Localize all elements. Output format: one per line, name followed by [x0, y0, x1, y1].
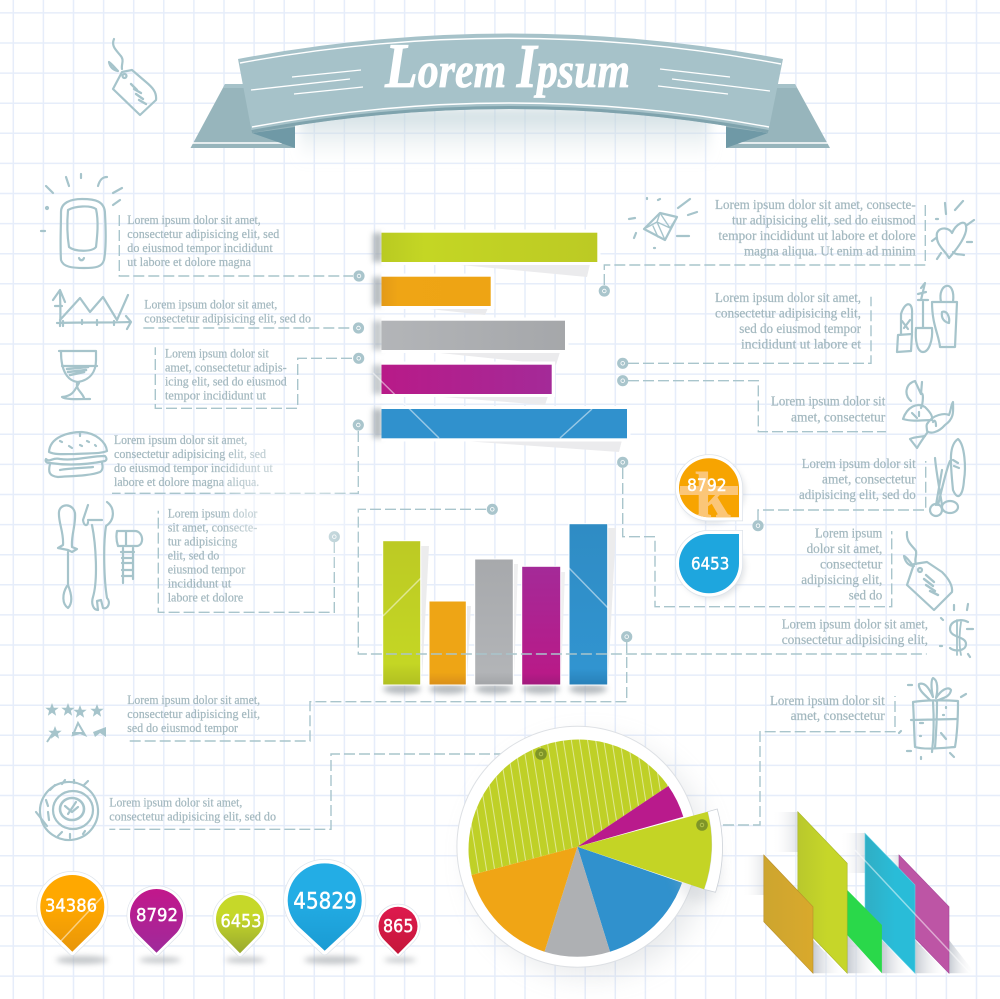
map pin: 8792 [130, 889, 183, 963]
title text: Lorem Ipsum [384, 30, 630, 101]
text block: tire: consectetur adipisicing elit, sed do [109, 810, 276, 824]
text block: diamond and heart: tur adipisicing elit, sed do eiusmod [732, 212, 916, 227]
isometric bar: magenta [899, 855, 949, 973]
text block: tire [109, 796, 276, 824]
node: pie top [535, 748, 547, 760]
slice: magenta [577, 786, 683, 847]
text block: tag: sed do [849, 588, 883, 602]
connector: graph text to bar [143, 322, 364, 334]
connector: scissors text [752, 461, 926, 531]
text block: scissors: Lorem ipsum dolor sit [802, 456, 916, 471]
icon: gift [899, 678, 966, 759]
connector: column chart to stars text [127, 631, 632, 741]
slice: hatched lime [469, 740, 668, 875]
text block: stars: Lorem ipsum dolor sit amet, [127, 693, 260, 707]
slice: exploded lime [577, 809, 723, 902]
pin value: 45829 [293, 890, 357, 914]
icon: price tag right [904, 532, 952, 610]
text block: burger: Lorem ipsum dolor sit amet, [114, 433, 247, 447]
connector: diamond text [599, 203, 925, 297]
callout drop: 6453 [679, 534, 745, 599]
icon: scissors and bread [930, 439, 965, 516]
column chart [383, 524, 616, 694]
map pin: 6453 [216, 895, 265, 963]
text block: gift: amet, consectetur [791, 708, 885, 723]
text block: gift [770, 693, 885, 723]
text block: dollar [782, 616, 928, 647]
text block: tag: consectetur [820, 556, 883, 572]
text block: tools: incididunt ut [168, 577, 232, 591]
isometric bar: olive [798, 812, 847, 973]
icon: line graph [53, 290, 131, 329]
text block: tag: adipisicing elit, [801, 572, 882, 587]
text block: cosmetics: incididunt ut labore et [741, 336, 861, 351]
connector: pie to gift text [708, 696, 895, 825]
text block: cosmetics [715, 290, 862, 351]
text block: tag: Lorem ipsum [815, 525, 883, 540]
column: orange [429, 601, 466, 685]
icon: tools [58, 502, 142, 610]
bar: magenta [382, 365, 552, 394]
text block: stars: consectetur adipisicing elit, [127, 707, 260, 721]
text block: burger: labore et dolore magna aliqua. [114, 475, 259, 489]
icon: burger [46, 432, 107, 477]
text block: scissors [799, 456, 916, 502]
icon: wine glass [59, 351, 97, 399]
isometric bar: cyan [865, 833, 915, 973]
text block: diamond and heart [715, 197, 916, 258]
text block: scissors: amet, consectetur [822, 472, 916, 486]
text block: glass: amet, consectetur adipis- [165, 361, 287, 375]
isometric bar chart [742, 812, 975, 973]
column: magenta [522, 566, 561, 685]
isometric bar: orange [764, 855, 813, 973]
icon: stars [45, 703, 106, 742]
text block: gift: Lorem ipsum dolor sit [770, 693, 885, 708]
text block: glass: tempor incididunt ut [165, 389, 266, 403]
connector: cosmetics text [617, 297, 871, 369]
icon: diamond [629, 198, 697, 248]
text block: phone: consectetur adipisicing elit, sed [127, 227, 280, 241]
icon: heart [932, 201, 974, 259]
isometric bar: green [847, 890, 882, 973]
text block: tools: eiusmod tempor [168, 563, 246, 577]
bar: lime [382, 233, 597, 262]
callout drop: 8792 [679, 458, 745, 532]
column: blue [569, 524, 608, 685]
text block: cosmetics: sed do eiusmod tempor [739, 321, 862, 336]
text block: tire: Lorem ipsum dolor sit amet, [109, 796, 242, 810]
text block: phone: ut labore et dolore magna [127, 255, 251, 269]
text block: burger [114, 433, 273, 489]
bar: blue [382, 409, 627, 438]
icon: price tag top left [109, 39, 156, 115]
connector: phone text to bar [119, 215, 365, 282]
connector: fish text [617, 375, 886, 432]
text block: phone: do eiusmod tempor incididunt [127, 241, 273, 255]
icon: fish [903, 381, 953, 448]
title ribbon banner [190, 30, 830, 163]
text block: fish: amet, consectetur [791, 409, 886, 424]
connector: pie to tire text [109, 754, 535, 829]
text block: graph [144, 297, 311, 325]
icon: tyre [35, 777, 103, 845]
connector: tools text [158, 511, 340, 612]
pin value: 34386 [45, 896, 97, 916]
text block: dollar: Lorem ipsum dolor sit amet, [782, 616, 928, 631]
text block: tag: dolor sit amet, [807, 541, 882, 556]
text block: cosmetics: consectetur adipisicing elit, [715, 306, 861, 321]
icon: smartphone [41, 174, 122, 268]
pin value: 6453 [220, 911, 262, 932]
text block: graph: consectetur adipisicing elit, sed do [144, 311, 311, 325]
text block: diamond and heart: tempor incididunt ut labore et dolore [718, 228, 916, 243]
icon: cosmetics [897, 283, 957, 352]
text block: diamond and heart: magna aliqua. Ut enim ad minim [744, 243, 916, 258]
column: lime [383, 541, 421, 685]
bar: orange [382, 277, 491, 306]
callout value: 6453 [691, 554, 729, 574]
text block: glass [165, 347, 287, 403]
node: pie right [696, 819, 708, 831]
text block: tools: labore et dolore [168, 591, 244, 605]
map pin: 45829 [288, 863, 362, 964]
text block: stars: sed do eiusmod tempor [127, 721, 239, 735]
text block: stars [127, 693, 260, 735]
connector: column chart frame to dollar text [358, 504, 927, 654]
text block: tag [801, 525, 883, 602]
text block: glass: Lorem ipsum dolor sit [165, 347, 269, 361]
icon: dollar [940, 604, 973, 657]
text block: tools: tur adipisicing [168, 535, 238, 549]
connector: glass text to bar [155, 347, 364, 408]
text block: tools: Lorem ipsum dolor [168, 507, 258, 521]
slice: grey [544, 847, 610, 957]
watermark streaks [59, 373, 970, 973]
bar: grey [382, 321, 565, 350]
connector: burger text to bar [112, 419, 364, 493]
text block: graph: Lorem ipsum dolor sit amet, [144, 297, 277, 311]
callout value: 8792 [687, 476, 727, 496]
text block: phone [127, 213, 280, 269]
pin value: 8792 [136, 905, 178, 926]
slice: orange [472, 847, 577, 952]
text block: fish: Lorem ipsum dolor sit [771, 394, 886, 409]
text block: dollar: consectetur adipisicing elit, [782, 632, 928, 647]
text block: burger: consectetur adipisicing elit, sed [114, 447, 267, 461]
map pin: 34386 [40, 875, 108, 964]
text block: tools: sit amet, consecte- [168, 521, 257, 535]
text block: tools: elit, sed do [168, 549, 219, 563]
text block: cosmetics: Lorem ipsum dolor sit amet, [715, 290, 861, 305]
slice: blue [577, 847, 682, 952]
text block: diamond and heart: Lorem ipsum dolor sit amet, consecte- [715, 197, 916, 212]
text block: glass: icing elit, sed do eiusmod [165, 375, 287, 389]
text block: burger: do eiusmod tempor incididunt ut [114, 461, 273, 475]
callout drop: 8792: k [694, 459, 731, 532]
horizontal bar chart [373, 230, 630, 452]
column: grey [475, 559, 513, 685]
text block: scissors: adipisicing elit, sed do [799, 487, 916, 502]
pie chart [457, 726, 723, 976]
text block: fish [771, 394, 886, 424]
text block: phone: Lorem ipsum dolor sit amet, [127, 213, 261, 227]
connector: tag text [617, 457, 892, 607]
map pin: 865 [378, 907, 418, 962]
text block: tools [168, 507, 258, 605]
pin value: 865 [383, 916, 414, 937]
